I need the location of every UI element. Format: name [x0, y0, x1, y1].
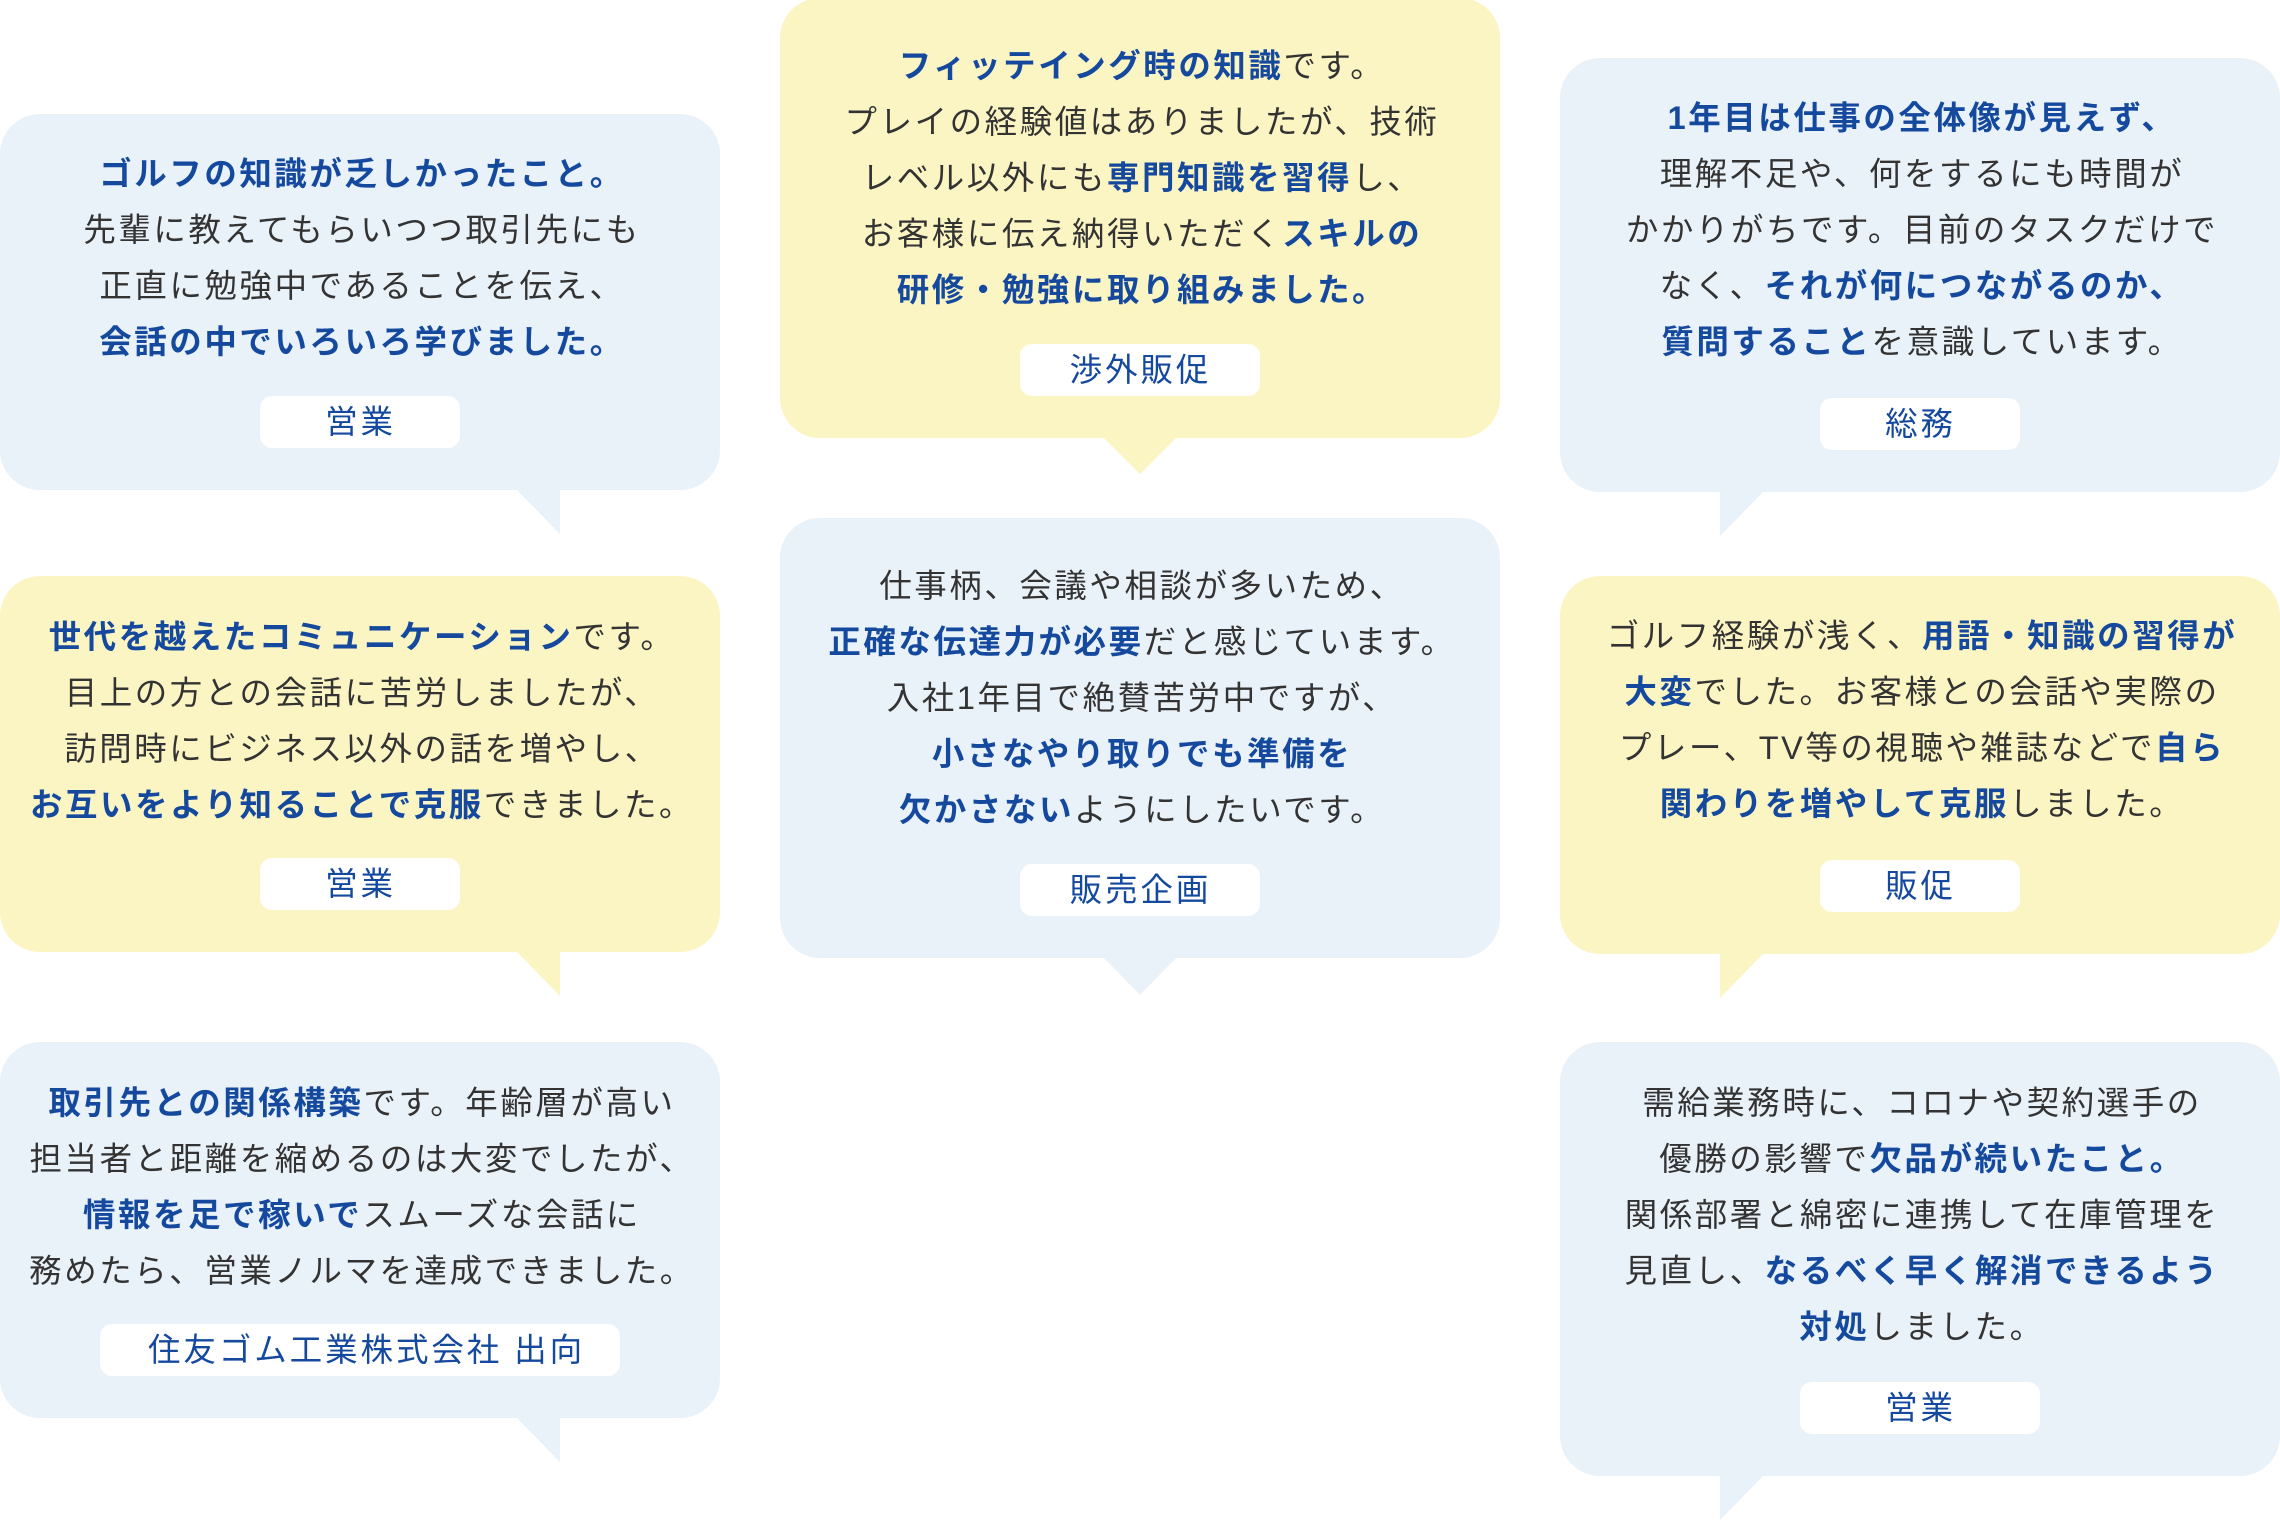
bubble body — [1560, 58, 2280, 492]
bubble body — [1560, 1042, 2280, 1476]
panel: big picture of work (general affairs) — [1560, 58, 2280, 536]
quote text: 入社1年目で絶賛苦労中ですが、 — [887, 680, 1397, 716]
quote text — [845, 48, 1439, 308]
bubble tail — [1104, 438, 1176, 474]
department tag — [1800, 1382, 2040, 1434]
quote text: 取引先との関係構築です。年齢層が高い — [48, 1084, 676, 1120]
bubble body — [0, 114, 720, 490]
quote text: 務めたら、営業ノルマを達成できました。 — [29, 1252, 695, 1288]
quote text: 訪問時にビジネス以外の話を増やし、 — [64, 731, 660, 767]
department tag — [1820, 860, 2020, 912]
quote text — [1607, 618, 2237, 822]
panel: golf terminology (promotion) — [1560, 576, 2280, 998]
bubble body — [780, 518, 1500, 958]
panel: supply shortages (sales) — [1560, 1042, 2280, 1520]
quote text: お客様に伝え納得いただくスキルの — [862, 216, 1422, 252]
panel: golf knowledge (sales) — [0, 114, 720, 534]
quote text: かかりがちです。目前のタスクだけで — [1626, 212, 2218, 248]
department tag — [1020, 344, 1260, 396]
quote text: なく、それが何につながるのか、 — [1660, 268, 2184, 304]
bubble body — [0, 576, 720, 952]
panel: fitting knowledge (overseas promotion) — [780, 0, 1500, 474]
quote text: 1年目は仕事の全体像が見えず、 — [1668, 100, 2176, 136]
department tag — [1820, 398, 2020, 450]
quote text: 関わりを増やして克服しました。 — [1660, 786, 2184, 822]
quote text: 正確な伝達力が必要だと感じています。 — [828, 624, 1456, 660]
quote text: 理解不足や、何をするにも時間が — [1660, 156, 2184, 192]
quote text — [29, 1084, 695, 1288]
bubble body — [1560, 576, 2280, 954]
quote text: ゴルフ経験が浅く、用語・知識の習得が — [1607, 618, 2237, 654]
quote text: 正直に勉強中であることを伝え、 — [99, 268, 625, 304]
bubble tail — [1720, 1476, 1763, 1520]
quote text: 担当者と距離を縮めるのは大変でしたが、 — [30, 1140, 694, 1176]
quote text: お互いをより知ることで克服できました。 — [30, 787, 694, 823]
department tag: 販促 — [1885, 868, 1956, 904]
quote text: プレー、TV等の視聴や雑誌などで自ら — [1619, 730, 2225, 766]
quote text: フィッテイング時の知識です。 — [899, 48, 1385, 84]
quote text: 世代を越えたコミュニケーションです。 — [49, 619, 675, 655]
department tag: 営業 — [325, 866, 396, 902]
quote text: 見直し、なるべく早く解消できるよう — [1625, 1252, 2219, 1288]
department tag: 営業 — [1885, 1390, 1956, 1426]
department tag — [260, 858, 460, 910]
department tag — [100, 1324, 620, 1376]
department tag — [1020, 864, 1260, 916]
quote text: 優勝の影響で欠品が続いたこと。 — [1659, 1140, 2185, 1176]
quote text: 質問することを意識しています。 — [1661, 324, 2183, 360]
bubble tail — [517, 490, 560, 534]
quote text: レベル以外にも専門知識を習得し、 — [862, 160, 1422, 196]
quote text: 会話の中でいろいろ学びました。 — [99, 324, 625, 360]
department tag — [260, 396, 460, 448]
department tag: 総務 — [1885, 406, 1956, 442]
quote text: 情報を足で稼いでスムーズな会話に — [83, 1196, 641, 1232]
quote text: プレイの経験値はありましたが、技術 — [845, 104, 1439, 140]
bubble tail — [1720, 492, 1763, 536]
quote text: 対処しました。 — [1799, 1308, 2045, 1344]
quote text — [828, 568, 1456, 828]
quote text: ゴルフの知識が乏しかったこと。 — [99, 156, 625, 192]
bubble body — [0, 1042, 720, 1418]
quote text: 関係部署と綿密に連携して在庫管理を — [1625, 1196, 2219, 1232]
quote text: 小さなやり取りでも準備を — [932, 736, 1352, 772]
department tag: 渉外販促 — [1070, 352, 1211, 388]
panel: client relationships (Sumitomo Rubber secondment) — [0, 1042, 720, 1462]
quote text: 欠かさないようにしたいです。 — [899, 792, 1385, 828]
panel: cross-generation communication (sales) — [0, 576, 720, 996]
quote text: 需給業務時に、コロナや契約選手の — [1642, 1084, 2202, 1120]
department tag: 営業 — [325, 404, 396, 440]
bubble body — [780, 0, 1500, 438]
quote text — [1625, 1084, 2219, 1344]
bubble tail — [1104, 958, 1176, 995]
quote text: 仕事柄、会議や相談が多いため、 — [879, 568, 1405, 604]
quote text — [30, 619, 694, 823]
panel: accurate communication (sales planning) — [780, 518, 1500, 995]
department tag: 住友ゴム工業株式会社 出向 — [148, 1332, 585, 1368]
quote text: 研修・勉強に取り組みました。 — [897, 272, 1387, 308]
bubble tail — [517, 1418, 560, 1462]
quote text: 先輩に教えてもらいつつ取引先にも — [83, 212, 641, 248]
bubble tail — [517, 952, 560, 996]
quote text — [1626, 100, 2218, 360]
quote text: 目上の方との会話に苦労しましたが、 — [65, 675, 659, 711]
quote text — [83, 156, 641, 360]
department tag: 販売企画 — [1070, 872, 1211, 908]
bubble tail — [1720, 954, 1763, 998]
quote text: 大変でした。お客様との会話や実際の — [1624, 674, 2220, 710]
